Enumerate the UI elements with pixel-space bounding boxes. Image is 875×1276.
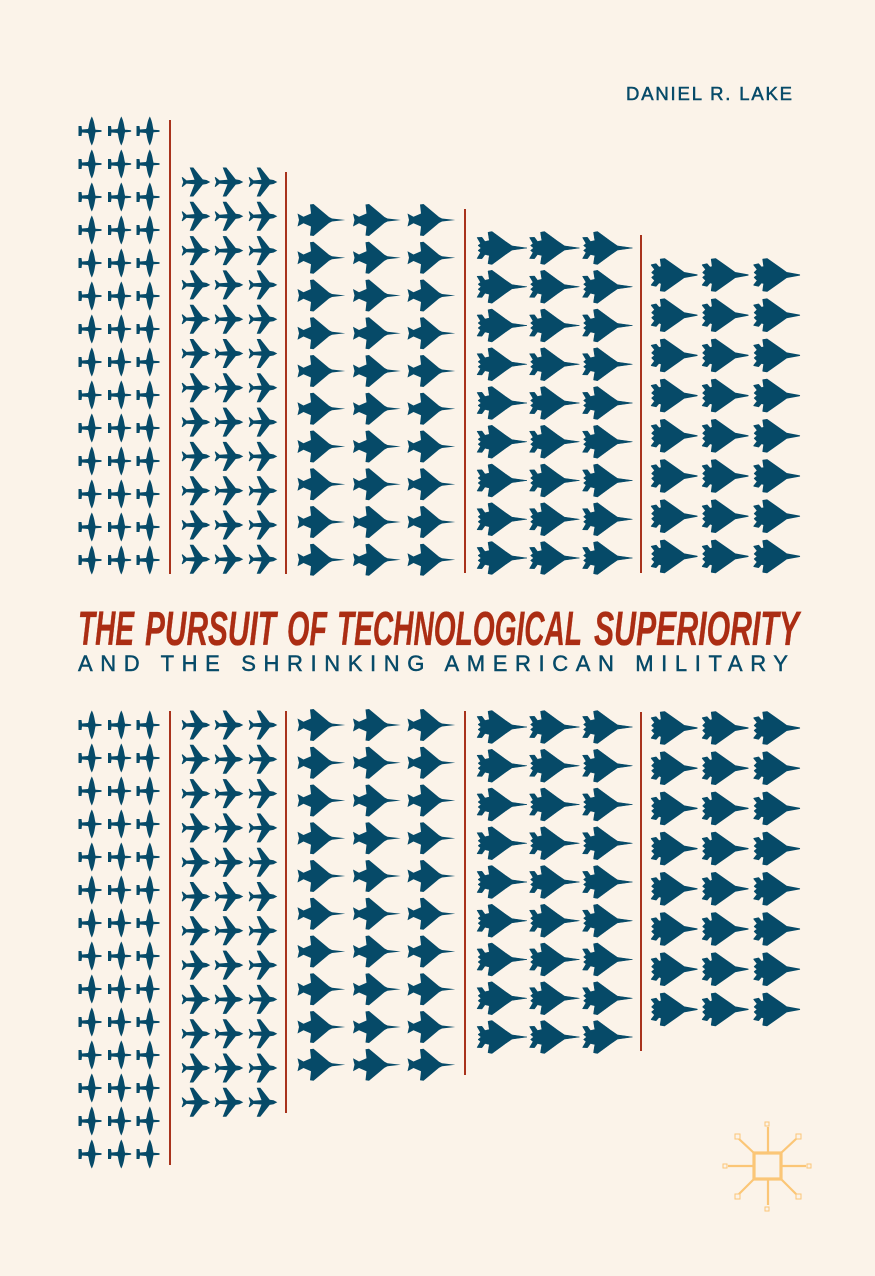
bottom divider 2 <box>285 711 287 1113</box>
bottom column 4: F-15 style fighters <box>477 710 632 1054</box>
top column 1: propeller planes <box>78 116 160 574</box>
title: PURSUIT <box>145 603 278 656</box>
title: THE <box>78 603 135 656</box>
publisher logo: circuit chip <box>723 1122 811 1211</box>
bottom column 3: delta wing jets <box>298 709 455 1081</box>
author name: DANIEL R. LAKE <box>626 83 792 104</box>
top divider 2 <box>285 172 287 574</box>
bottom divider 4 <box>640 712 642 1051</box>
bottom divider 1 <box>169 711 171 1165</box>
bottom column 1: propeller planes <box>78 710 160 1168</box>
title: TECHNOLOGICAL <box>337 603 582 656</box>
subtitle: AND THE SHRINKING AMERICAN MILITARY <box>78 651 788 676</box>
bottom divider 3 <box>464 711 466 1075</box>
bottom column 5: stealth fighters <box>652 712 800 1026</box>
title <box>78 603 802 656</box>
top column 4: F-15 style fighters <box>477 232 632 574</box>
bottom column 2: early jets <box>182 710 277 1117</box>
top column 2: early jets <box>182 168 277 574</box>
top divider 3 <box>464 209 466 573</box>
top divider 4 <box>640 235 642 573</box>
top column 3: delta wing jets <box>298 204 455 576</box>
top column 5: stealth fighters <box>652 259 800 573</box>
top divider 1 <box>169 120 171 574</box>
title: OF <box>287 603 328 656</box>
